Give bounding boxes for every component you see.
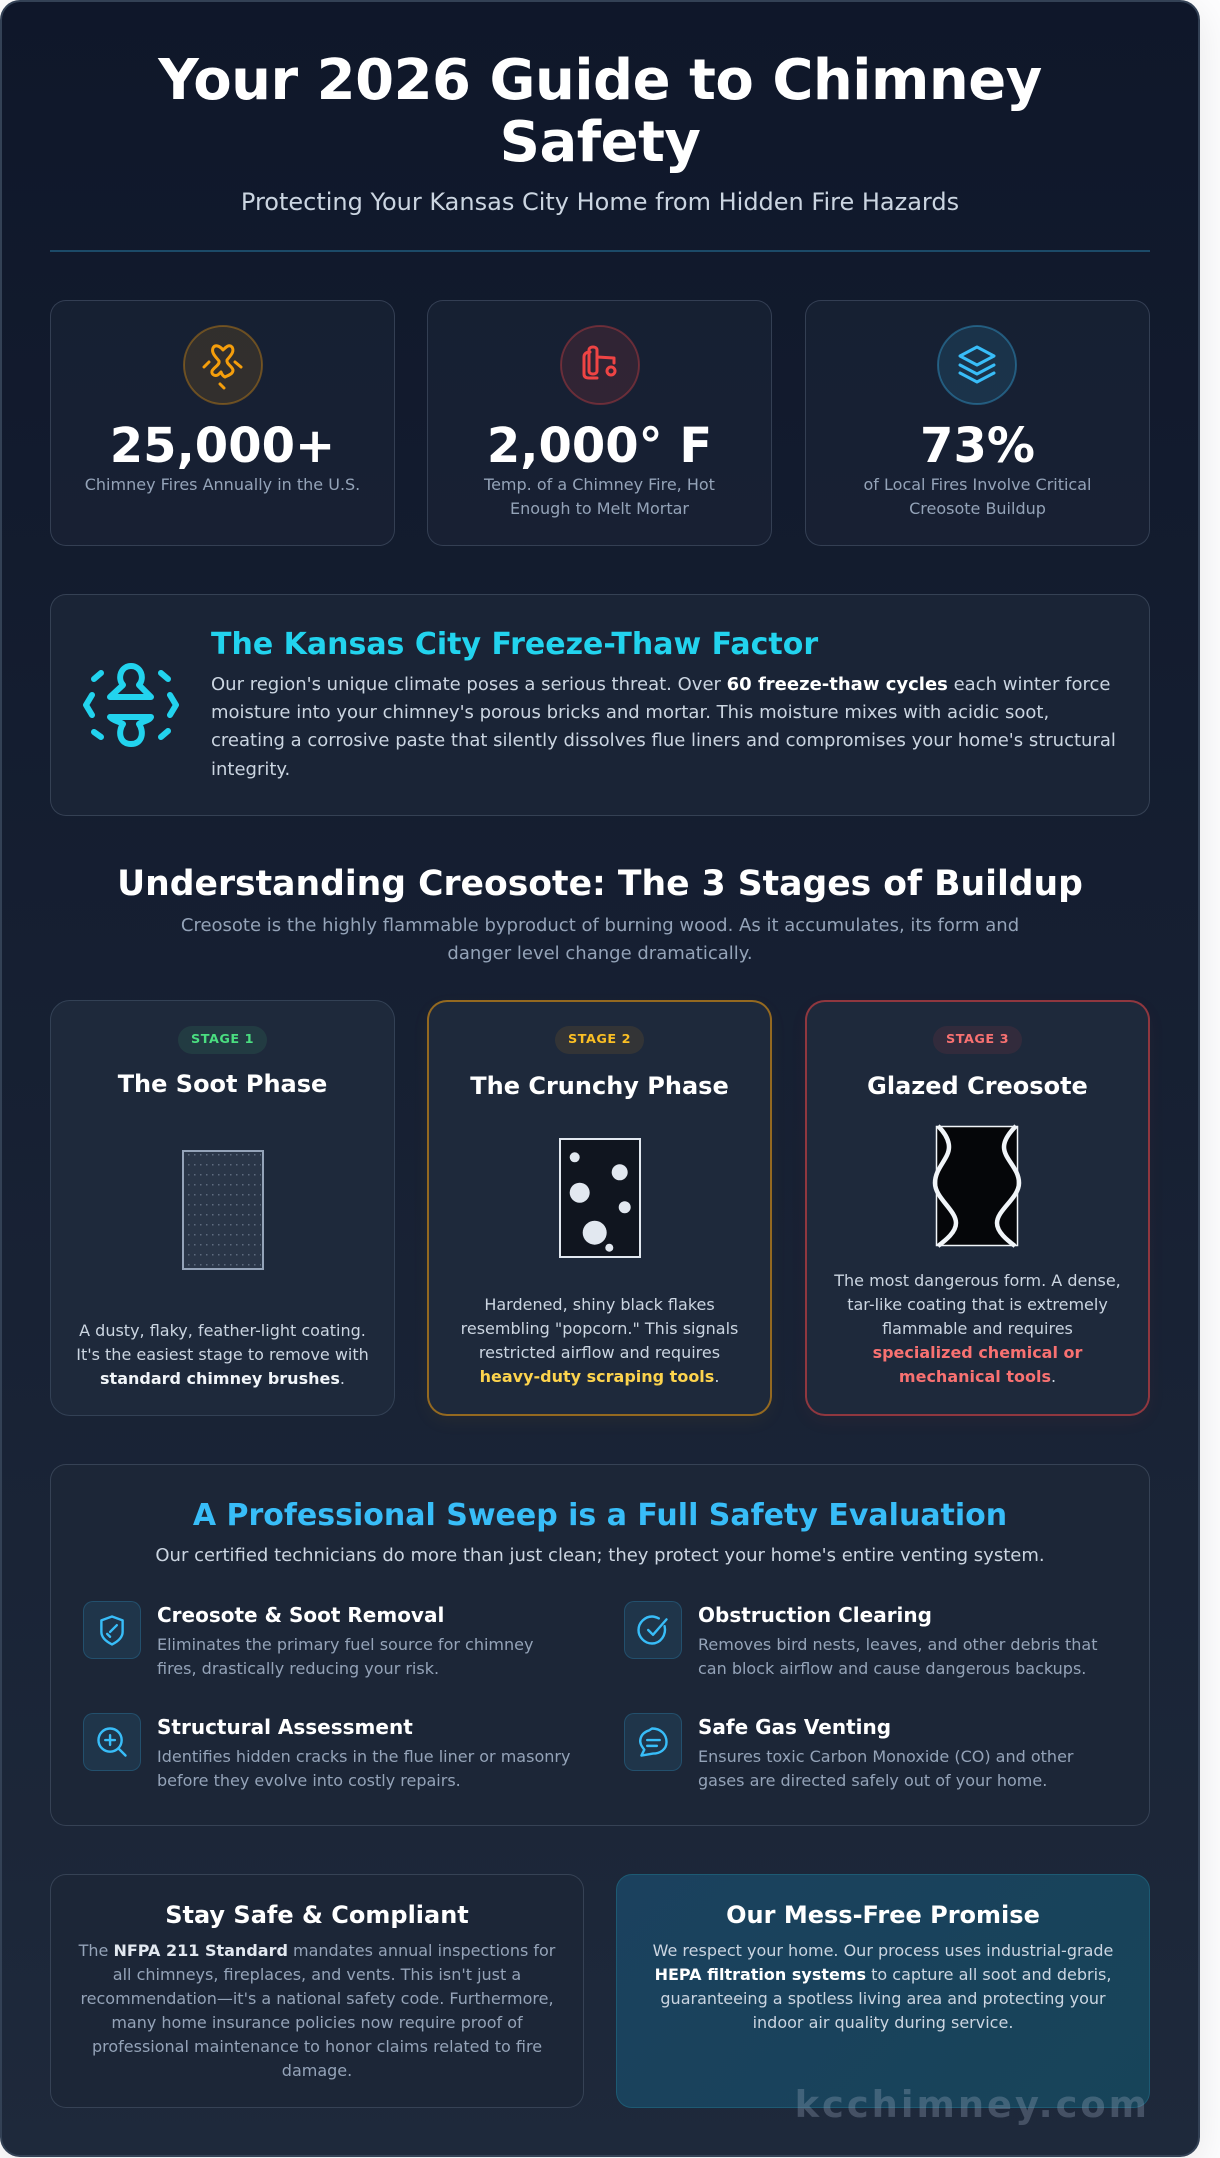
section description: danger level change dramatically.: [447, 943, 753, 964]
body text: many home insurance policies now require proof of: [111, 2013, 523, 2032]
item text: [698, 1635, 1098, 1678]
item text: [698, 1747, 1074, 1790]
item text: can block airflow and cause dangerous backups.: [698, 1659, 1086, 1678]
header rule: [50, 250, 1150, 252]
body text: [78, 1941, 556, 2080]
panel: freeze-thaw factor: [50, 594, 1150, 816]
stage description: [834, 1271, 1121, 1386]
item title: Creosote & Soot Removal: [157, 1603, 444, 1627]
stat label: Temp. of a Chimney Fire, Hot: [484, 475, 715, 494]
heading: A Professional Sweep is a Full Safety Evaluation: [193, 1498, 1007, 1533]
body text: Our region's unique climate poses a serious threat. Over 60 freeze-thaw cycles each winter force: [211, 674, 1110, 695]
stat label: Enough to Melt Mortar: [510, 499, 689, 518]
stage title: Glazed Creosote: [867, 1072, 1088, 1100]
stage description: tar-like coating that is extremely: [847, 1295, 1108, 1314]
item: creosote removal: [83, 1601, 533, 1678]
section description: Creosote is the highly flammable byproduct of burning wood. As it accumulates, its form and: [181, 915, 1019, 936]
panel: mess-free promise: [616, 1874, 1150, 2108]
panel: professional sweep: [50, 1464, 1150, 1826]
body text: creating a corrosive paste that silently dissolves flue liners and compromises your home's structural: [211, 730, 1116, 751]
item: safe gas venting: [624, 1713, 1074, 1790]
title: Your 2026 Guide to Chimney: [158, 48, 1042, 113]
glazed illustration: [932, 1124, 1022, 1248]
icon: check circle: [624, 1601, 682, 1659]
body text: damage.: [282, 2061, 352, 2080]
stat number: 73%: [920, 418, 1035, 474]
stat card: chimney fires: [50, 300, 395, 546]
icon: magnifier: [83, 1713, 141, 1771]
stage description: restricted airflow and requires: [479, 1343, 720, 1362]
stage description: A dusty, flaky, feather-light coating.: [79, 1321, 366, 1340]
heading: Our Mess-Free Promise: [726, 1901, 1040, 1929]
title: [158, 48, 1042, 175]
stat card: creosote: [805, 300, 1150, 546]
item text: gases are directed safely out of your home.: [698, 1771, 1047, 1790]
soot illustration: [182, 1150, 264, 1270]
icon: shield: [83, 1601, 141, 1659]
item title: Obstruction Clearing: [698, 1603, 932, 1627]
stage badge: [555, 1026, 644, 1054]
panel: stay safe and compliant: [50, 1874, 584, 2108]
section heading: Understanding Creosote: The 3 Stages of Buildup: [117, 864, 1083, 904]
stat card: temperature: [427, 300, 772, 546]
item title: Structural Assessment: [157, 1715, 413, 1739]
body text: moisture into your chimney's porous bricks and mortar. This moisture mixes with acidic soot,: [211, 702, 1049, 723]
stat label: [864, 475, 1091, 518]
item text: Eliminates the primary fuel source for chimney: [157, 1635, 533, 1654]
stat label: Chimney Fires Annually in the U.S.: [85, 475, 360, 494]
item text: [157, 1747, 570, 1790]
description: Our certified technicians do more than just clean; they protect your home's entire venting system.: [155, 1545, 1045, 1566]
item text: before they evolve into costly repairs.: [157, 1771, 461, 1790]
stage description: The most dangerous form. A dense,: [834, 1271, 1121, 1290]
stage title: The Soot Phase: [118, 1070, 327, 1098]
item text: fires, drastically reducing your risk.: [157, 1659, 439, 1678]
stat label: Creosote Buildup: [909, 499, 1046, 518]
stat label: of Local Fires Involve Critical: [864, 475, 1091, 494]
body text: indoor air quality during service.: [753, 2013, 1013, 2032]
body text: guaranteeing a spotless living area and protecting your: [660, 1989, 1106, 2008]
body text: HEPA filtration systems to capture all soot and debris,: [655, 1965, 1111, 1984]
crunchy illustration: [559, 1138, 641, 1258]
item text: Removes bird nests, leaves, and other debris that: [698, 1635, 1098, 1654]
icon: flame: [183, 325, 263, 405]
stage description: specialized chemical or: [873, 1343, 1082, 1362]
item text: [157, 1635, 533, 1678]
stage card 2: [427, 1000, 772, 1416]
body text: recommendation—it's a national safety code. Furthermore,: [80, 1989, 554, 2008]
section description: [181, 915, 1019, 964]
icon: speech bubble: [624, 1713, 682, 1771]
heading: Stay Safe & Compliant: [165, 1901, 469, 1929]
stat label: [484, 475, 715, 518]
stage description: [461, 1295, 738, 1386]
stage description: It's the easiest stage to remove with: [76, 1345, 369, 1364]
stage card 3: [805, 1000, 1150, 1416]
body text: [211, 674, 1116, 780]
stat number: 25,000+: [110, 418, 335, 474]
stage card 1: [50, 1000, 395, 1416]
heading: The Kansas City Freeze-Thaw Factor: [211, 627, 818, 662]
body text: all chimneys, fireplaces, and vents. This isn't just a: [113, 1965, 521, 1984]
item: obstruction clearing: [624, 1601, 1098, 1678]
stage badge: STAGE 2: [568, 1032, 631, 1047]
body text: The NFPA 211 Standard mandates annual inspections for: [79, 1941, 555, 1960]
body text: We respect your home. Our process uses industrial-grade: [653, 1941, 1113, 1960]
stage description: standard chimney brushes.: [100, 1369, 345, 1388]
watermark: kcchimney.com: [795, 2083, 1150, 2126]
icon: thermometer: [560, 325, 640, 405]
icon: layers: [937, 325, 1017, 405]
stage badge: STAGE 3: [946, 1032, 1009, 1047]
stat number: 2,000° F: [487, 418, 712, 474]
title: Safety: [500, 110, 700, 175]
body text: [653, 1941, 1113, 2032]
stage badge: STAGE 1: [191, 1032, 254, 1047]
item text: Ensures toxic Carbon Monoxide (CO) and other: [698, 1747, 1074, 1766]
stage description: mechanical tools.: [899, 1367, 1056, 1386]
stage badge: [933, 1026, 1022, 1054]
stage badge: [178, 1026, 267, 1054]
stage description: flammable and requires: [882, 1319, 1073, 1338]
stage description: [76, 1321, 369, 1388]
body text: integrity.: [211, 759, 290, 780]
stage description: Hardened, shiny black flakes: [484, 1295, 715, 1314]
item text: Identifies hidden cracks in the flue liner or masonry: [157, 1747, 570, 1766]
item title: Safe Gas Venting: [698, 1715, 891, 1739]
subtitle: Protecting Your Kansas City Home from Hidden Fire Hazards: [241, 188, 959, 216]
item: structural assessment: [83, 1713, 570, 1790]
stage title: The Crunchy Phase: [470, 1072, 729, 1100]
body text: professional maintenance to honor claims related to fire: [92, 2037, 542, 2056]
icon: freeze-thaw: [83, 663, 179, 747]
stage description: resembling "popcorn." This signals: [461, 1319, 738, 1338]
stage description: heavy-duty scraping tools.: [480, 1367, 719, 1386]
